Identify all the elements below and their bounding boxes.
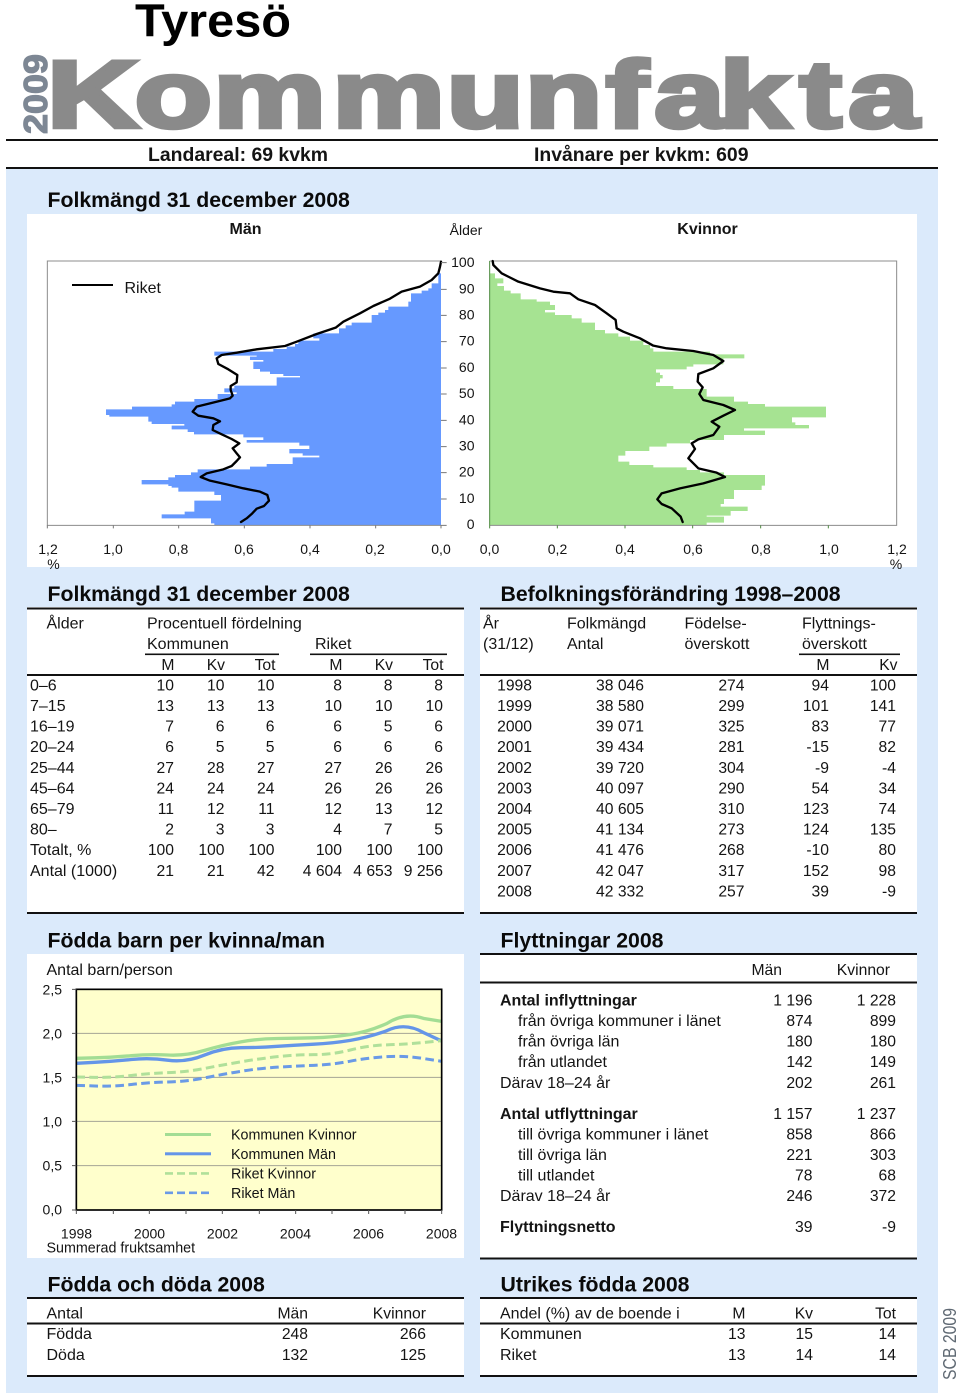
- panel: age distribution table: 45–64: [30, 780, 75, 797]
- panel: age distribution table: 27: [325, 760, 342, 777]
- panel: population change table: 74: [879, 801, 896, 818]
- age axis labels: 90: [459, 280, 475, 296]
- chart legend: [165, 1128, 357, 1202]
- percent axis labels: 0,2: [548, 541, 567, 557]
- panel: population change table: 39 720: [596, 760, 644, 777]
- panel: foreign born table: 13: [728, 1347, 746, 1364]
- x axis labels: 1998: [61, 1226, 92, 1242]
- panel: age distribution table: Antal (1000): [30, 863, 117, 880]
- heading: foreign born: Utrikes födda 2008: [500, 1272, 690, 1296]
- panel: migration table: 261: [870, 1075, 896, 1092]
- panel: population pyramid: Ålder: [450, 222, 483, 238]
- heading: age table: Folkmängd 31 december 2008: [48, 582, 350, 606]
- panel: age distribution table: 4 604: [303, 863, 342, 880]
- panel: population change table: 41 476: [596, 842, 644, 859]
- panel: population change table: 1998: [497, 678, 532, 694]
- panel: population change table: 325: [718, 719, 745, 736]
- panel: migration table: 149: [870, 1054, 896, 1071]
- panel: population change table: 100: [870, 678, 896, 694]
- panel: age distribution table: 20–24: [30, 739, 75, 756]
- panel: migration table: -9: [882, 1219, 896, 1236]
- x axis labels: 2002: [207, 1226, 238, 1242]
- panel: migration table: 180: [870, 1034, 896, 1051]
- panel: population change table: 80: [879, 842, 896, 859]
- panel: age distribution table: 100: [248, 842, 275, 859]
- panel: age distribution table: 6: [333, 739, 342, 756]
- panel: age distribution table: 5: [384, 719, 393, 736]
- panel: age distribution table: M: [161, 657, 174, 674]
- panel: age distribution table: 100: [417, 842, 443, 859]
- panel: age distribution table: 8: [384, 678, 393, 694]
- panel: population change table: 42 332: [596, 883, 644, 900]
- y axis labels: [43, 982, 62, 1218]
- panel: migration table: från övriga län: [518, 1033, 619, 1051]
- heading: migration: Flyttningar 2008: [500, 928, 664, 952]
- panel: age distribution table: 12: [426, 801, 443, 818]
- wordmark: Kommunfakta: Kommunfakta: [47, 41, 920, 147]
- panel: population change table: -15: [806, 739, 829, 756]
- panel: population change table: -9: [882, 883, 896, 900]
- panel: age distribution table: Kommunen: [147, 636, 229, 653]
- panel: population change table: 152: [803, 863, 829, 880]
- panel: migration table: 78: [795, 1168, 813, 1184]
- panel: age distribution table: 7: [165, 719, 174, 736]
- panel: foreign born table: 14: [796, 1347, 813, 1364]
- panel: migration table: Därav 18–24 år: [500, 1187, 611, 1205]
- panel: age distribution table: 10: [207, 678, 225, 694]
- panel: migration table: Män: [751, 962, 782, 979]
- age axis labels: 70: [459, 332, 475, 348]
- panel: age distribution table: 21: [157, 863, 174, 880]
- panel: population change table: 2001: [497, 739, 532, 756]
- panel: migration table: 1 196: [773, 992, 813, 1010]
- panel: age distribution table: 3: [216, 822, 225, 839]
- panel: age distribution table: 27: [257, 760, 274, 777]
- panel: migration table: 68: [879, 1168, 896, 1184]
- key facts: [6, 139, 938, 169]
- panel: age distribution table: 100: [316, 842, 342, 859]
- panel: population change table: 317: [718, 863, 744, 880]
- age axis labels: 80: [459, 306, 475, 322]
- panel: age distribution table: 7: [384, 822, 392, 839]
- x axis labels: 2006: [353, 1226, 384, 1242]
- panel: age distribution table: Procentuell fördelning: [147, 616, 302, 632]
- panel: age distribution table: 13: [157, 698, 174, 715]
- panel: migration table: Antal inflyttningar: [500, 992, 637, 1010]
- panel: age distribution table: 16–19: [30, 719, 75, 736]
- panel: population change table: 274: [718, 678, 745, 694]
- panel: births and deaths table: 132: [282, 1347, 308, 1364]
- y axis labels: 1,5: [43, 1070, 62, 1086]
- panel: age distribution table: 11: [258, 801, 274, 818]
- age axis labels: 100: [451, 254, 475, 270]
- panel: foreign born table: 14: [879, 1326, 896, 1343]
- panel: migration table: 1 237: [857, 1106, 896, 1123]
- panel: migration table: Kvinnor: [837, 962, 890, 979]
- panel: age distribution table: 6: [165, 739, 174, 756]
- panel: migration table: 1 157: [773, 1106, 812, 1123]
- panel: age distribution table: Kv: [207, 657, 225, 674]
- panel: population change table: 257: [718, 883, 744, 900]
- y axis labels: 0,5: [43, 1158, 62, 1174]
- pyramid: men: [47, 261, 447, 528]
- panel: births and deaths table: Döda: [46, 1347, 85, 1364]
- panel: age distribution table: Totalt, %: [30, 842, 91, 859]
- panel: migration table: 142: [786, 1054, 812, 1071]
- percent axis labels: 0,0: [480, 541, 499, 557]
- panel: migration table: 372: [870, 1188, 896, 1205]
- percent axis labels: 0,4: [615, 541, 635, 557]
- panel: population change table: -4: [882, 760, 896, 777]
- legend: Riket: [72, 280, 162, 297]
- panel: population change table: -9: [815, 760, 829, 777]
- panel: births and deaths table: Födda: [46, 1326, 92, 1343]
- panel: age distribution table: 12: [325, 801, 342, 818]
- percent axis labels: 1,2: [38, 541, 58, 557]
- panel: births and deaths table: Män: [277, 1306, 308, 1322]
- percent axis labels: [38, 541, 907, 572]
- panel: age distribution table: 4 653: [353, 863, 393, 880]
- panel: population change table: 101: [803, 698, 829, 715]
- key facts: Invånare per kvkm: 609: [534, 143, 749, 166]
- panel: age distribution table: Kv: [375, 657, 393, 674]
- panel: births and deaths table: 266: [400, 1326, 426, 1343]
- panel: population change table: 77: [879, 719, 896, 736]
- age axis labels: 50: [459, 385, 475, 401]
- panel: migration table: 866: [870, 1126, 896, 1144]
- age axis labels: 20: [459, 464, 475, 480]
- y axis labels: 1,0: [43, 1114, 62, 1130]
- key facts: Landareal: 69 kvkm: [148, 144, 328, 166]
- panel: population change table: 123: [803, 801, 829, 818]
- panel: age distribution table: 65–79: [30, 801, 75, 818]
- panel: age distribution table: Tot: [255, 657, 276, 674]
- panel: population change table: 2006: [497, 842, 532, 859]
- panel: age distribution table: 10: [257, 678, 275, 694]
- chart legend: Kommunen Män: [231, 1147, 336, 1163]
- panel: age distribution table: 24: [257, 780, 275, 797]
- panel: age distribution table: 6: [216, 719, 225, 736]
- panel: age distribution table: 80–: [30, 822, 57, 839]
- panel: population change table: 273: [718, 822, 745, 839]
- panel: foreign born table: Andel (%) av de boende i: [500, 1306, 680, 1322]
- panel: age distribution table: 100: [148, 842, 174, 859]
- percent axis labels: 1,2: [887, 541, 907, 557]
- panel: age distribution table: 2: [165, 822, 174, 839]
- panel: population change table: 38 046: [596, 678, 644, 694]
- panel: population pyramid: Kvinnor: [677, 221, 738, 238]
- panel: population change table: Folkmängd: [567, 616, 646, 632]
- percent axis labels: 0,4: [300, 541, 320, 557]
- panel: population change table: Födelse-: [684, 616, 747, 632]
- panel: age distribution table: Tot: [423, 657, 444, 674]
- panel: population change table: 39 434: [596, 739, 644, 756]
- x axis labels: 2008: [426, 1226, 457, 1242]
- panel: population change table: (31/12): [483, 636, 534, 653]
- panel: age distribution table: 42: [257, 863, 274, 880]
- panel: population change table: 94: [812, 678, 829, 694]
- panel: age distribution table: 5: [266, 739, 275, 756]
- panel: foreign born table: 14: [879, 1347, 896, 1364]
- panel: foreign born table: Riket: [500, 1347, 537, 1364]
- panel: births and deaths table: 125: [400, 1347, 426, 1364]
- panel: population change table: 299: [718, 698, 744, 715]
- panel: age distribution table: 10: [426, 698, 443, 715]
- age axis labels: 30: [459, 438, 475, 454]
- age axis labels: 60: [459, 359, 475, 375]
- panel: age distribution table: 12: [207, 801, 224, 818]
- panel: age distribution table: 9 256: [404, 863, 443, 880]
- panel: population change table: 40 097: [596, 780, 644, 797]
- panel: age distribution table: 6: [434, 739, 443, 756]
- panel: population change table: 82: [879, 739, 896, 756]
- panel: migration table: 899: [870, 1013, 896, 1030]
- panel: age distribution table: 10: [157, 678, 174, 694]
- panel: migration table: till övriga kommuner i länet: [518, 1126, 709, 1144]
- panel: migration table: från övriga kommuner i länet: [518, 1012, 721, 1030]
- panel: age distribution table: 5: [434, 822, 443, 839]
- panel: age distribution table: Riket: [315, 636, 352, 653]
- source: SCB 2009: SCB 2009: [940, 1308, 960, 1380]
- panel: migration table: 1 228: [857, 992, 896, 1010]
- panel: population change table: 41 134: [596, 822, 644, 839]
- panel: migration table: Antal utflyttningar: [500, 1106, 638, 1123]
- age axis labels: [451, 254, 475, 532]
- panel: population change table: Flyttnings-: [802, 616, 876, 632]
- panel: fertility chart: [27, 954, 464, 1258]
- panel: age distribution table: 5: [216, 739, 225, 756]
- panel: migration table: till utlandet: [518, 1168, 595, 1184]
- panel: age distribution table: 100: [198, 842, 225, 859]
- panel: age distribution table: 6: [266, 719, 275, 736]
- panel: age distribution table: M: [329, 657, 342, 674]
- panel: population change table: 2000: [497, 719, 532, 736]
- percent axis labels: 0,2: [365, 541, 385, 557]
- panel: age distribution table: 6: [434, 719, 443, 736]
- panel: age distribution table: 26: [375, 760, 393, 777]
- panel: population change table: 2002: [497, 760, 532, 777]
- panel: births and deaths table: Kvinnor: [373, 1306, 426, 1322]
- panel: fertility chart: Antal barn/person: [46, 962, 173, 979]
- percent axis labels: 1,0: [819, 541, 839, 557]
- panel: births and deaths table: Antal: [46, 1306, 83, 1322]
- panel: migration table: [480, 953, 917, 1260]
- panel: foreign born table: [480, 1297, 917, 1377]
- panel: population change table: 39: [812, 883, 829, 900]
- panel: population change table: 268: [718, 842, 745, 859]
- panel: population change table: överskott: [802, 636, 867, 653]
- panel: population change table: 281: [718, 739, 744, 756]
- panel: population change table: 98: [879, 863, 896, 880]
- panel: migration table: 221: [786, 1147, 812, 1164]
- x axis labels: [61, 1226, 457, 1242]
- panel: age distribution table: 13: [257, 698, 275, 715]
- panel: births and deaths table: 248: [282, 1326, 308, 1343]
- panel: age distribution table: 26: [325, 780, 342, 797]
- panel: age distribution table: 10: [375, 698, 393, 715]
- panel: migration table: 180: [786, 1034, 813, 1051]
- percent axis labels: %: [890, 556, 902, 572]
- year label: 2009: 2009: [17, 54, 54, 134]
- percent axis labels: 1,0: [103, 541, 123, 557]
- panel: migration table: Flyttningsnetto: [500, 1219, 616, 1236]
- heading: births and deaths: Födda och döda 2008: [48, 1272, 265, 1296]
- panel: population change table: 310: [718, 801, 745, 818]
- panel: population change table: 42 047: [596, 863, 644, 880]
- panel: age distribution table: 0–6: [30, 678, 57, 694]
- panel: population change table: [480, 607, 917, 914]
- chart legend: Riket Män: [231, 1186, 295, 1202]
- panel: population change table: 39 071: [596, 719, 644, 736]
- heading: births per person: Födda barn per kvinna/man: [48, 928, 325, 952]
- panel: age distribution table: 21: [207, 863, 224, 880]
- panel: migration table: 39: [795, 1219, 812, 1236]
- heading: population change: Befolkningsförändring 1998–2008: [500, 582, 841, 606]
- panel: migration table: 246: [786, 1188, 813, 1205]
- panel: age distribution table: 24: [157, 780, 174, 797]
- percent axis labels: 0,0: [431, 541, 451, 557]
- age axis labels: 10: [459, 490, 475, 506]
- panel: age distribution table: 10: [325, 698, 342, 715]
- panel: age distribution table: 27: [157, 760, 174, 777]
- panel: age distribution table: 28: [207, 760, 225, 777]
- panel: foreign born table: Kommunen: [500, 1326, 582, 1343]
- panel: population change table: 34: [879, 780, 896, 797]
- panel: population change table: 2003: [497, 780, 532, 797]
- panel: age distribution table: 25–44: [30, 760, 75, 777]
- chart legend: Kommunen Kvinnor: [231, 1128, 357, 1144]
- panel: population change table: 141: [870, 698, 896, 715]
- panel: population change table: 2007: [497, 863, 532, 880]
- line chart: [72, 989, 442, 1214]
- panel: population change table: överskott: [684, 636, 750, 653]
- panel: migration table: från utlandet: [518, 1053, 608, 1071]
- panel: population change table: Antal: [567, 636, 603, 653]
- heading: population pyramid: Folkmängd 31 december 2008: [48, 188, 350, 212]
- panel: population change table: -10: [806, 842, 829, 859]
- panel: population change table: 290: [718, 780, 745, 797]
- panel: foreign born table: 15: [796, 1326, 813, 1343]
- panel: age distribution table: 26: [375, 780, 393, 797]
- panel: age distribution table: 24: [207, 780, 225, 797]
- panel: age distribution table: 7–15: [30, 698, 66, 715]
- x axis labels: 2000: [134, 1226, 165, 1242]
- panel: age distribution table: 13: [375, 801, 393, 818]
- y axis labels: 2,0: [43, 1026, 62, 1042]
- panel: migration table: 202: [786, 1075, 812, 1092]
- panel: age distribution table: 6: [384, 739, 393, 756]
- percent axis labels: 0,8: [169, 541, 188, 557]
- panel: population pyramid: [27, 214, 917, 572]
- panel: age distribution table: 13: [207, 698, 225, 715]
- panel: foreign born table: Kv: [795, 1306, 813, 1322]
- panel: migration table: Därav 18–24 år: [500, 1074, 611, 1092]
- panel: population change table: 83: [812, 719, 829, 736]
- panel: births and deaths table: [27, 1297, 464, 1377]
- panel: age distribution table: 8: [434, 678, 443, 694]
- y axis labels: 2,5: [43, 982, 62, 998]
- panel: population change table: År: [483, 614, 500, 632]
- panel: population change table: M: [816, 657, 830, 674]
- legend: Riket: Riket: [124, 280, 162, 297]
- panel: population change table: 38 580: [596, 698, 644, 715]
- panel: migration table: 874: [786, 1013, 813, 1030]
- panel: age distribution table: 3: [266, 822, 275, 839]
- panel: foreign born table: 13: [728, 1326, 746, 1343]
- panel: age distribution table: 4: [333, 822, 342, 839]
- panel: population change table: 54: [812, 780, 829, 797]
- age axis labels: 40: [459, 412, 475, 428]
- panel: age distribution table: Ålder: [46, 614, 85, 632]
- panel: age distribution table: [27, 607, 464, 914]
- panel: population change table: 135: [870, 822, 896, 839]
- percent axis labels: 0,6: [234, 541, 254, 557]
- panel: age distribution table: 26: [426, 780, 443, 797]
- panel: population change table: 1999: [497, 698, 532, 715]
- age axis labels: 0: [467, 516, 475, 532]
- panel: population pyramid: Män: [230, 221, 262, 238]
- x axis labels: 2004: [280, 1226, 311, 1242]
- panel: fertility chart: Summerad fruktsamhet: [46, 1240, 195, 1256]
- panel: foreign born table: M: [732, 1306, 746, 1322]
- chart legend: Riket Kvinnor: [231, 1166, 316, 1182]
- panel: migration table: 858: [786, 1126, 813, 1144]
- panel: foreign born table: Tot: [875, 1306, 897, 1322]
- panel: age distribution table: 100: [366, 842, 393, 859]
- percent axis labels: %: [47, 556, 60, 572]
- pyramid: women: [490, 261, 897, 528]
- panel: age distribution table: 6: [333, 719, 342, 736]
- percent axis labels: 0,6: [683, 541, 703, 557]
- y axis labels: 0,0: [43, 1202, 62, 1218]
- panel: population change table: 2004: [497, 801, 532, 818]
- panel: age distribution table: 26: [426, 760, 443, 777]
- panel: age distribution table: 8: [333, 678, 342, 694]
- panel: population change table: 40 605: [596, 801, 644, 818]
- panel: population change table: 124: [803, 822, 829, 839]
- panel: population change table: 2008: [497, 883, 532, 900]
- panel: population change table: 304: [718, 760, 745, 777]
- panel: migration table: till övriga län: [518, 1147, 607, 1164]
- panel: migration table: 303: [870, 1147, 896, 1164]
- panel: age distribution table: 11: [158, 801, 174, 818]
- panel: population change table: Kv: [879, 657, 898, 674]
- percent axis labels: 0,8: [751, 541, 771, 557]
- panel: population change table: 2005: [497, 822, 532, 839]
